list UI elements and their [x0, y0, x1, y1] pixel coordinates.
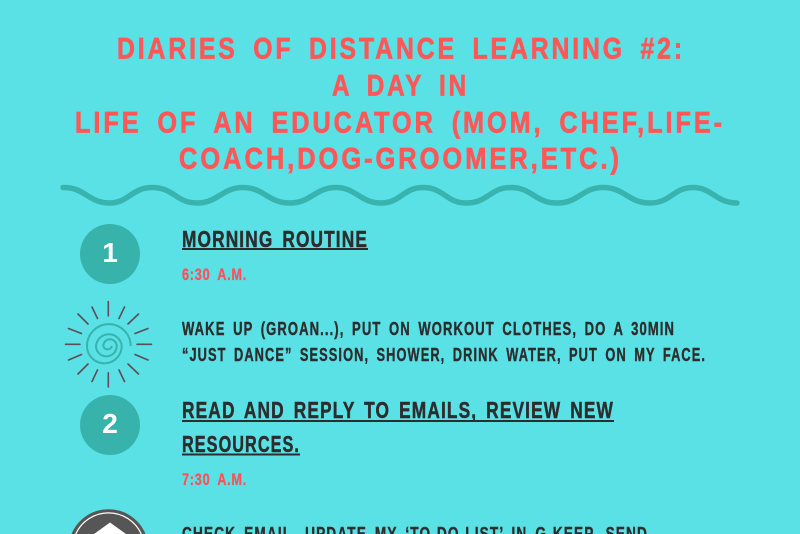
title: A DAY IN [332, 70, 469, 102]
step 1 description [182, 319, 706, 365]
icon: home [72, 509, 146, 534]
step 2 time: 7:30 A.M. [182, 470, 247, 489]
step 2 heading: RESOURCES. [182, 431, 300, 457]
title [75, 32, 725, 176]
title: COACH,DOG-GROOMER,ETC.) [179, 142, 622, 176]
step 1 heading: MORNING ROUTINE [182, 226, 368, 252]
step 2 heading: READ AND REPLY TO EMAILS, REVIEW NEW [182, 397, 614, 423]
icon: sun spiral [66, 302, 152, 387]
step 2 number badge [80, 395, 140, 455]
step 2 heading [182, 397, 614, 457]
step 2 number badge: 2 [102, 408, 118, 439]
title: DIARIES OF DISTANCE LEARNING #2: [117, 32, 685, 66]
wavy divider [63, 187, 737, 203]
step 1 number badge: 1 [102, 237, 118, 268]
step 1 number badge [80, 224, 140, 284]
step 1 time: 6:30 A.M. [182, 265, 247, 284]
